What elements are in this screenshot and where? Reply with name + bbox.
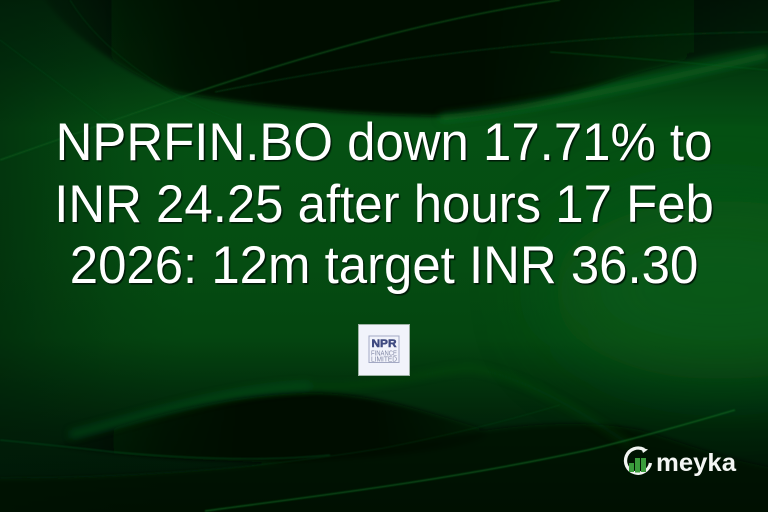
company logo: NPR Finance Limited: LIMITED	[371, 356, 397, 364]
title	[54, 113, 714, 296]
brand logo: meyka	[624, 446, 737, 477]
title: 2026: 12m target INR 36.30	[70, 236, 698, 295]
title: NPRFIN.BO down 17.71% to	[56, 113, 712, 172]
dark lower waves	[0, 393, 768, 512]
icon: ring with green bars	[626, 448, 650, 473]
dark upper waves	[40, 0, 768, 116]
company logo: NPR Finance Limited: NPR	[372, 338, 397, 350]
company logo: NPR Finance Limited	[358, 324, 410, 376]
wordmark: meyka	[656, 449, 737, 477]
company logo: NPR Finance Limited: FINANCE	[371, 350, 397, 358]
title: INR 24.25 after hours 17 Feb	[54, 174, 714, 234]
